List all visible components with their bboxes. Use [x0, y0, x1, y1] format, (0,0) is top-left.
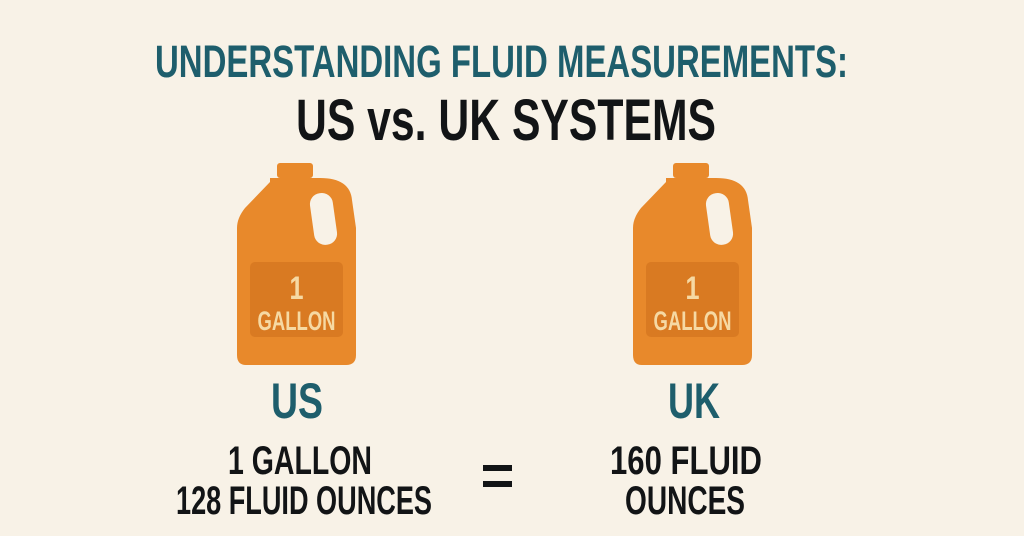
icon: US gallon jug: GALLON [258, 306, 336, 336]
icon: UK gallon jug [633, 163, 752, 365]
equals sign [483, 465, 512, 487]
icon: US gallon jug: 1 [290, 270, 304, 306]
UK label: UK [668, 373, 720, 429]
icon: US gallon jug [237, 163, 356, 365]
icon: UK gallon jug: GALLON [654, 306, 732, 336]
icon: UK gallon jug: 1 [686, 270, 700, 306]
title: US vs. UK SYSTEMS [296, 88, 716, 153]
UK measurement text: OUNCES [625, 479, 745, 523]
US measurement text [176, 439, 432, 523]
US measurement text: 128 FLUID OUNCES [176, 479, 432, 523]
UK measurement text: 160 FLUID [610, 439, 762, 483]
UK measurement text [610, 439, 762, 523]
title [155, 36, 848, 153]
US measurement text: 1 GALLON [228, 439, 372, 483]
US label: US [271, 373, 323, 429]
